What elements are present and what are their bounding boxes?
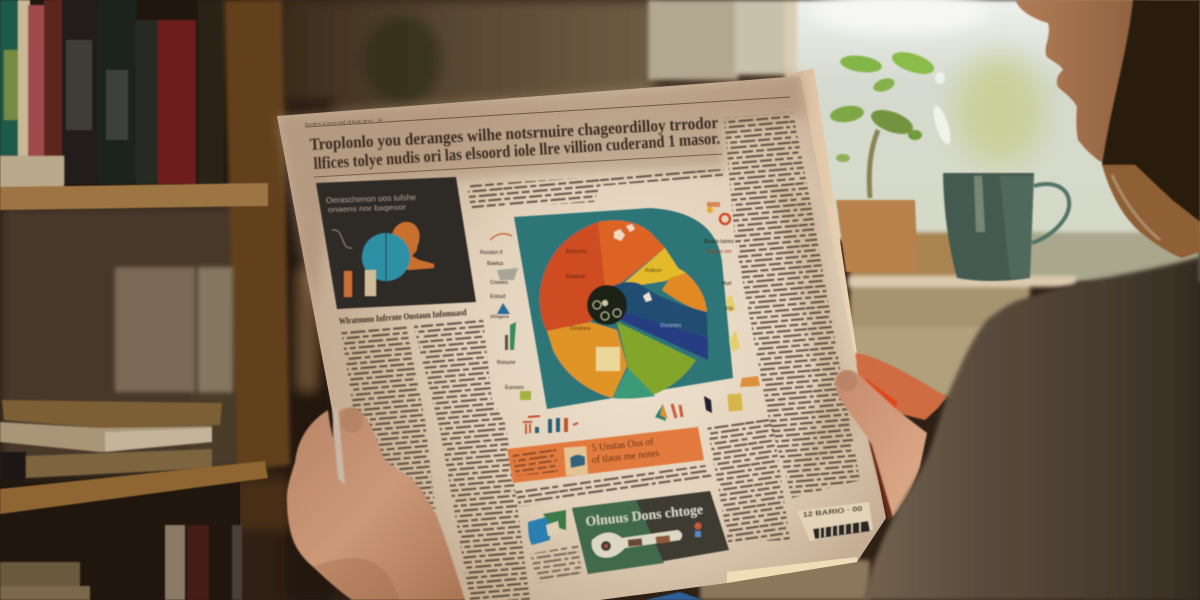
chart callouts: right side: drip (725, 306, 734, 312)
barcode label (797, 502, 873, 541)
second text column (413, 318, 530, 600)
lit lower strands (1102, 160, 1200, 258)
shelf interior (0, 0, 240, 600)
slice: red orange (540, 222, 607, 331)
labels on slices: Bostuons (566, 249, 587, 255)
teal panel (514, 208, 733, 409)
bookshelf (0, 0, 290, 600)
pie chart panel: Roilson (645, 268, 662, 274)
dark hair mass (1102, 0, 1200, 222)
pie hub (587, 285, 627, 325)
upright cream books (115, 267, 234, 462)
middle shelf back wall (0, 205, 240, 475)
back sheet of newspaper (790, 68, 858, 385)
chart callouts: left side: Eurooes (505, 385, 524, 391)
top shelf board (0, 183, 268, 210)
horizontal stacked books (0, 400, 222, 480)
left hand (287, 407, 465, 600)
potted plant (829, 48, 954, 272)
orange banner (507, 427, 704, 483)
person hair (1102, 0, 1200, 258)
pale square in orange slice (596, 347, 620, 371)
chart callouts: left side: Roisune (497, 360, 516, 366)
barcode (813, 521, 870, 539)
masthead rule and small text: Readers science and climate news · 14 (305, 118, 383, 128)
red glow (865, 378, 898, 410)
shadow along right margin (770, 180, 860, 480)
white map marks (614, 224, 635, 241)
caption under icon (530, 545, 582, 583)
chart callouts: left side: Shlogens (490, 314, 510, 319)
shelf upright (224, 0, 290, 470)
slice: teal bottom (612, 368, 655, 399)
right top text column (724, 112, 860, 498)
pill graphic (592, 530, 682, 558)
hair strand highlight (1112, 175, 1160, 240)
dark gap (866, 430, 895, 520)
chart callouts: right side: Buusis lumes (704, 239, 734, 245)
chart callouts: right side: Strooes om (706, 249, 732, 255)
under banner text (515, 465, 712, 507)
teal circle (362, 233, 410, 281)
thumbnail shade (341, 407, 363, 433)
dark infographic panel: onaens nor bagesor (328, 204, 407, 214)
top row of books (0, 0, 224, 188)
slice: orange top (598, 220, 665, 305)
headline: Troplonlo you deranges wilhe notsrnuire chageordilloy trrodor (309, 113, 719, 154)
paper sheet (277, 76, 886, 600)
person sweater (863, 257, 1200, 600)
left text column (341, 325, 445, 600)
chart callouts: left side (480, 234, 531, 400)
wrist shadow (312, 558, 400, 600)
chart callouts: right side: Hurt (722, 281, 732, 287)
blue item below newspaper (645, 592, 703, 600)
orange head shape (392, 222, 434, 270)
paper strip between fingers (332, 408, 345, 485)
left section heading: Wlratnunn Infrrnte Onstaun Infomuasd (338, 307, 467, 326)
blue and green icon (528, 510, 566, 545)
chart callouts: left side: Ruostun fi (480, 250, 503, 256)
headline: llfices tolye nudis ori las elsoord iole llre villion cuderand 1 masor. (313, 128, 720, 173)
small pictograms (655, 393, 743, 421)
barcode label: 12 BARIO · 00 (802, 506, 863, 519)
dark infographic panel: Oeraschenon uos tulshe (326, 193, 417, 205)
chart callouts: left side: Bawtus (487, 261, 504, 267)
small person icon (694, 522, 702, 530)
thumbnail shade (837, 371, 857, 391)
right hand (835, 353, 947, 520)
article columns (338, 112, 860, 600)
climate change banner: Olnuus Dons chtoge (585, 503, 704, 530)
climate change banner (572, 491, 729, 574)
wall behind newspaper (235, 0, 655, 600)
small bars (344, 271, 352, 297)
terracotta pot (836, 200, 918, 272)
lower shelf board (0, 461, 268, 514)
pie chart panel (514, 208, 733, 409)
newspaper (277, 76, 886, 600)
pie chart panel: Elovtiona (570, 326, 591, 332)
masthead rule and small text (305, 97, 790, 128)
chart callouts: left side: Crowies (490, 280, 509, 286)
pie chart panel: Oceantes (660, 323, 682, 329)
bottom books (0, 525, 242, 600)
palm and thumb (835, 370, 927, 517)
chart callouts: right side (704, 202, 760, 387)
slice: orange bottom (547, 322, 627, 398)
slice: navy band (620, 312, 708, 360)
plant leaves (829, 48, 954, 198)
mug (943, 173, 1069, 281)
dark infographic panel (316, 177, 476, 309)
slice: yellow (610, 248, 686, 295)
orange banner: 5 Unstas Ous of (591, 436, 655, 454)
slice: blue (605, 282, 708, 360)
bright bottom edge (727, 557, 857, 583)
slice: orange right (662, 273, 707, 312)
chart callouts: left side: Enisud (490, 294, 506, 300)
pie chart panel: Rawtuse (566, 274, 586, 280)
window and frame (648, 0, 1200, 600)
slice: green (617, 322, 696, 396)
shadow across the top of the paper (277, 76, 806, 410)
orange banner: of tlaus me notes (591, 448, 660, 466)
row of people icons (523, 416, 578, 434)
intro text above chart (467, 169, 725, 209)
upper finger (855, 353, 947, 420)
person face (1016, 0, 1150, 163)
lower middle text column (707, 417, 790, 542)
